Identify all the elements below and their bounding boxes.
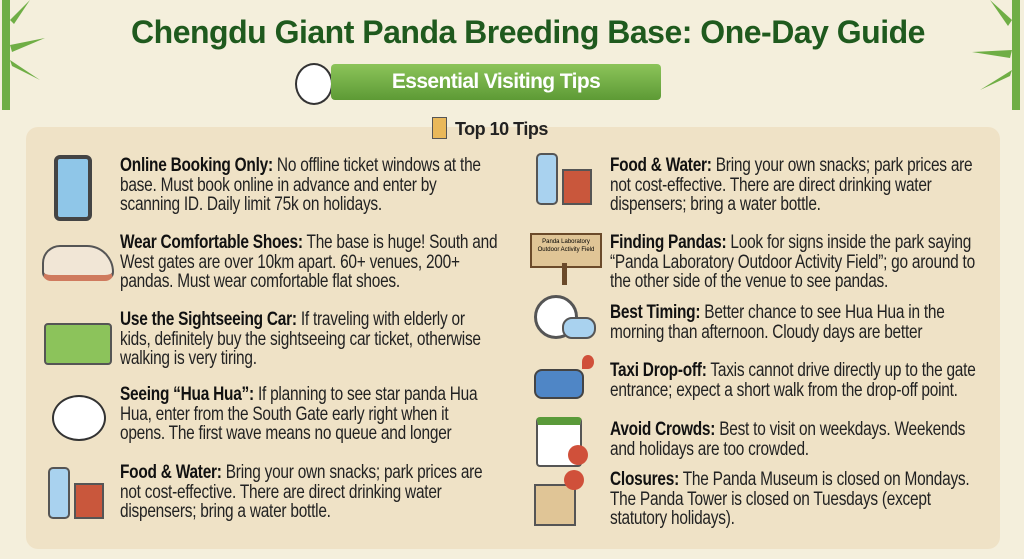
icon: sightseeing car (44, 323, 112, 365)
tip 11: Closures: The Panda Museum is closed on Mondays. The Panda Tower is closed on Tuesdays (except statutory holidays). (610, 469, 969, 529)
heading: top 10 tips: Top 10 Tips (455, 119, 548, 139)
icon: panda (52, 395, 106, 441)
icon: water and snacks (48, 467, 104, 519)
icon: taxi (534, 355, 594, 399)
icon: panda head (295, 63, 333, 105)
left column (42, 155, 497, 522)
icon: clock and cloud (534, 295, 596, 339)
icon: calendar (536, 417, 588, 467)
icon: signpost: Panda Laboratory Outdoor Activity Field (538, 239, 594, 253)
tip 4: Seeing “Hua Hua”: If planning to see star panda Hua Hua, enter from the South Gate early right when it opens. The first wave means no queue and longer (120, 384, 477, 444)
tip 10: Avoid Crowds: Best to visit on weekdays. Weekends and holidays are too crowded. (610, 419, 965, 460)
tip 6: Food & Water: Bring your own snacks; park prices are not cost-effective. There are direct drinking water dispensers; bring a water bottle. (610, 155, 972, 215)
banner: essential visiting tips (295, 63, 661, 105)
tip 7: Finding Pandas: Look for signs inside the park saying “Panda Laboratory Outdoor Activity Field”; go around to the other side of the venue to see pandas. (610, 232, 975, 292)
tip 3: Use the Sightseeing Car: If traveling with elderly or kids, definitely buy the sightseeing car ticket, otherwise walking is very tiring. (120, 309, 481, 369)
icon: phone (54, 155, 92, 221)
bamboo banner: Essential Visiting Tips (392, 70, 600, 93)
bamboo left (2, 0, 45, 110)
tip 9: Taxi Drop-off: Taxis cannot drive directly up to the gate entrance; expect a short walk from the drop-off point. (610, 360, 976, 400)
tip 1: Online Booking Only: No offline ticket windows at the base. Must book online in advance and enter by scanning ID. Daily limit 75k on holidays. (120, 155, 481, 215)
main panel (26, 127, 1000, 549)
icon: signpost (530, 233, 602, 285)
tip 2: Wear Comfortable Shoes: The base is huge! South and West gates are over 10km apart. 60+ venues, 200+ pandas. Must wear comfortable flat shoes. (120, 232, 497, 292)
bamboo banner (331, 64, 661, 100)
icon: museum and tower (534, 470, 584, 526)
icon: water and snacks (536, 153, 592, 205)
tip 8: Best Timing: Better chance to see Hua Hua in the morning than afternoon. Cloudy days are better (610, 302, 945, 342)
title: Chengdu Giant Panda Breeding Base: One-Day Guide (131, 14, 925, 50)
bamboo right (972, 0, 1020, 110)
tip 5: Food & Water: Bring your own snacks; park prices are not cost-effective. There are direct drinking water dispensers; bring a water bottle. (120, 462, 482, 522)
icon: shoe (42, 245, 114, 281)
right column (530, 153, 976, 529)
